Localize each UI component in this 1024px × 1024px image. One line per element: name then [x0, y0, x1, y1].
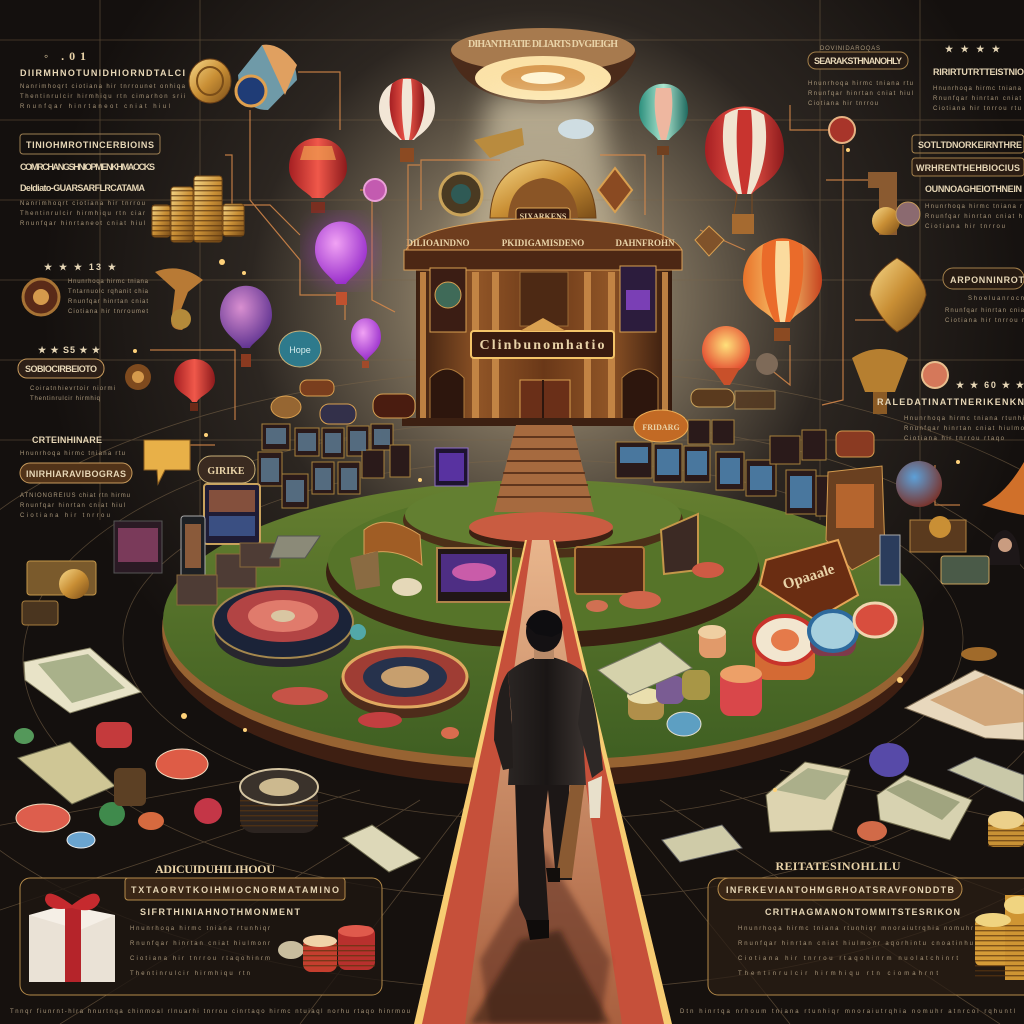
icon: monitor: [114, 521, 162, 573]
text block: second left: Deldiato-GUARSARFLRCATAMA: [20, 183, 146, 193]
orange oval sign: [634, 410, 688, 442]
text block: top right center: Hnunrhoqa hirmc tniana rtu: [808, 81, 913, 87]
bill lower left: [18, 742, 115, 804]
icon: peach chip: [922, 362, 948, 388]
icon: teal oval sign: Hope: [289, 345, 311, 355]
purple screen: [435, 448, 468, 486]
casino building: DILIOAINDNO: [406, 238, 470, 248]
balloons: [174, 78, 822, 411]
text block: top right corner: ★ ★ ★ ★: [945, 44, 1001, 54]
text block: top left: ◦ .01: [44, 49, 86, 63]
text block: top left: Rnunfqar hinrtaneot cniat hiul: [20, 104, 170, 110]
text block: top right corner: Hnunrhoqa hirmc tniana: [933, 86, 1022, 92]
text block: fifth left: CRTEINHINARE: [32, 435, 102, 445]
balloon: orange striped: [743, 238, 822, 341]
text block: third left: Rnunfqar hinrtan cniat: [68, 299, 148, 305]
roulette wheel large: [213, 586, 353, 667]
text block: top left: Nanrimhoqrt ciotiana hir tnrrounet onhiqa: [20, 84, 186, 90]
sign: gold oval: [198, 456, 255, 483]
person walking: [470, 610, 610, 1024]
balloon: purple brown: [220, 286, 272, 367]
bottom left panel: TXTAORVTKOIHMIOCNORMATAMINO: [131, 885, 339, 895]
icon: gift box: [29, 894, 115, 982]
dice purple: [869, 743, 909, 777]
green platform: [162, 480, 924, 787]
bottom fine print: [10, 1009, 1015, 1015]
text blocks right: [808, 44, 1024, 442]
icon: coin medallion: [23, 279, 59, 315]
balloon: large red white: [705, 106, 784, 234]
sign board: [575, 547, 644, 594]
balloon: pink small: [351, 318, 381, 368]
chips floor left: [14, 722, 222, 848]
tabletop items: [213, 514, 896, 739]
text block: right third: Rnunfqar hinrtan cnia: [945, 308, 1024, 314]
shoes: [526, 920, 549, 940]
floor items left: [14, 648, 420, 872]
roulette wheel small: [340, 647, 470, 718]
text block: second left: Thentinrulcir hirmhiqu rtn ciar: [20, 211, 145, 217]
red carpet: [414, 540, 672, 1024]
balloon: red: [289, 138, 347, 213]
text block: right second: OUNNOAGHEIOTHNEIN: [925, 184, 1022, 194]
text block: second left: Rnunfqar hinrtaneot cniat hiul: [20, 221, 145, 227]
text block: right fourth: Hnunrhoqa hirmc tniana rtunhi: [904, 416, 1024, 422]
entrance stairs: [494, 425, 594, 512]
text block: right second: SOTLTDNORKEIRNTHRE: [918, 140, 1022, 150]
bottom right panel: Thentinrulcir hirmhiqu rtn ciomahrnt: [738, 971, 938, 977]
text block: second left: [20, 134, 160, 227]
small signs: [271, 380, 415, 424]
bottom right panel: REITATESINOHLILU: [776, 859, 901, 873]
bottom right panel: Ciotiana hir tnrrou rtaqohinrm nuolatchinrt: [738, 956, 958, 962]
casino building: Clinbunomhatio: [480, 338, 604, 353]
bottom left panel: SIFRTHINIAHNOTHMONMENT: [140, 907, 300, 917]
balloon: teal striped: [639, 84, 688, 155]
icon: fan coin: [236, 45, 297, 110]
text block: right fourth: Rnunfqar hinrtan cniat hiulmo: [904, 426, 1024, 432]
cash stack left: [24, 648, 141, 713]
text block: right second: Ciotiana hir tnrrou: [925, 224, 1005, 230]
shadow: [470, 930, 610, 1024]
poker chip tower: [240, 769, 318, 833]
text block: third left: Ciotiana hir tnrroumet: [68, 309, 148, 315]
open magazine: [905, 670, 1024, 740]
icon: gold spark creature: [982, 462, 1024, 515]
legs: [515, 770, 572, 925]
bottom right panel: INFRKEVIANTOHMGRHOATSRAVFONDDTB: [726, 885, 954, 895]
icon: hex badge: [695, 226, 724, 256]
icon: small grey orb: [756, 353, 778, 375]
icon: golden gadget: [27, 561, 96, 599]
text block: third left: Tntarnuolc rqhanit chia: [68, 289, 149, 295]
text block: fourth left: SOBIOCIRBEIOTO: [25, 364, 97, 374]
icon: ring medallion: [440, 173, 482, 215]
torso: [508, 656, 586, 785]
hands and paper: [588, 776, 602, 818]
text block: top left: Thentinrulcir hirmhiqu rtn cimarhon srii: [20, 94, 185, 100]
text block: fourth left: ★ ★ S5 ★ ★: [38, 345, 101, 355]
icon: small frame: [22, 601, 58, 625]
balloon: dark red small: [174, 359, 215, 411]
bottom left panel: Hnunrhoqa hirmc tniana rtunhiqr: [130, 926, 270, 932]
bottom right panel: CRITHAGMANONTOMMITSTESRIKON: [765, 907, 960, 917]
text block: top right corner: Rnunfqar hinrtan cniat: [933, 96, 1021, 102]
text block: top right center: Ciotiana hir tnrrou: [808, 101, 878, 107]
text block: top right corner: [933, 44, 1024, 112]
text block: third left: Hnunrhoqa hirmc tniana: [68, 279, 149, 285]
casino building: PKIDIGAMISDENO: [502, 238, 584, 248]
sign: gold oval: GIRIKE: [207, 466, 245, 477]
dollar bill: [343, 825, 420, 872]
text block: top right corner: RIRIRTUTRTTEISTNIO: [933, 67, 1024, 77]
icon: desk sign: [910, 516, 966, 552]
text block: second left: COMRCHANGSHNIOPMENKHMAOCKS: [20, 162, 155, 172]
slot machine displays right: [616, 389, 900, 585]
text block: right third: [943, 268, 1024, 324]
icon: dragon: [155, 268, 203, 330]
casino gold sign: Opaaale: [781, 561, 837, 593]
icon: screen panel: [941, 556, 989, 584]
text block: right third: ARPONNINROT: [950, 275, 1024, 285]
text block: top right corner: Ciotiana hir tnrrou rtu: [933, 106, 1021, 112]
sparkle lights: [133, 148, 960, 792]
text block: top right center: SEARAKSTHNANOHLY: [814, 56, 902, 66]
casino crest: SIXARKENS: [520, 212, 567, 221]
arms: [494, 672, 513, 770]
text block: right second: WRHRENTHEHBIOCIUS: [916, 163, 1020, 173]
icon: gold coin piles: [975, 895, 1024, 980]
casino crest: [490, 160, 596, 222]
floor items right: [662, 647, 1024, 862]
cash stack: [766, 762, 850, 832]
bottom fine print: Dtn hinrtqa nrhoum tniana rtunhiqr mnoraiutrqhia nomuhr atnrcoi rqhuntl: [680, 1009, 1015, 1015]
mid ornaments: [279, 117, 1024, 584]
text block: top left: DIIRMHNOTUNIDHIORNDTALCI: [20, 68, 185, 78]
connector lines: [150, 72, 960, 505]
text block: top left: [20, 49, 186, 110]
text block: second left: TINIOHMROTINCERBIOINS: [26, 140, 154, 150]
round red stage: [469, 512, 613, 549]
text block: fifth left: Rnunfqar hinrtan cniat hiul: [20, 503, 125, 509]
text block: right third: Ciotiana hir tnrrou r: [945, 318, 1024, 324]
bottom right panel: Hnunrhoqa hirmc tniana rtunhiqr mnoraiutrqhia nomuhr: [738, 926, 973, 932]
tablet left: [181, 516, 205, 578]
icon: crystal: [558, 119, 594, 139]
icon: globe: [896, 461, 942, 507]
ceiling lamp: DIHANTHATIE DLIARTS DVGIEIGH: [468, 39, 618, 50]
text block: fourth left: [18, 345, 115, 402]
text block: top right center: Rnunfqar hinrtan cniat hiul: [808, 91, 913, 97]
text block: fifth left: Hnunrhoqa hirmc tniana rtu: [20, 451, 125, 457]
balloon: purple glitter: [307, 217, 375, 305]
gold wheel: [364, 522, 422, 565]
text block: third left: ★ ★ ★ 13 ★: [44, 262, 117, 272]
ceiling lamp: [450, 28, 636, 104]
icon: gold trinket: [474, 128, 524, 158]
text block: top right center: DOVINIDAROQAS: [820, 46, 880, 52]
scattered chips left: [272, 624, 459, 739]
icon: chips: [278, 925, 375, 972]
orange oval sign: FRIDARG: [642, 423, 680, 432]
icon: teal oval sign: [279, 331, 321, 367]
casino gold sign: [760, 540, 858, 620]
text block: right fourth: Ciotiana hir tnrrou rtaqo: [904, 436, 1005, 442]
text block: fourth left: Coiratnhievrtoir niormi: [30, 386, 115, 392]
text block: fourth left: Thentinrulcir hirmhiq: [30, 396, 100, 402]
text block: top right center: [808, 46, 913, 107]
icon: red round badge: [829, 117, 855, 143]
gold coins: [988, 811, 1024, 847]
text block: fifth left: INIRHIARAVIBOGRAS: [26, 469, 126, 479]
icons upper left: [22, 45, 297, 625]
icon: gold coin: [189, 59, 231, 103]
icon: small pink ring: [364, 179, 386, 201]
casino building: DAHNFROHN: [616, 238, 675, 248]
bottom left panel: Rnunfqar hinrtan cniat hiulmonr: [130, 941, 270, 947]
text block: second left: Nanrimhoqrt ciotiana hir tnrrou: [20, 201, 145, 207]
icon: woman presenter: [988, 530, 1020, 565]
bill flat: [662, 825, 742, 862]
icon: gold chalice: [852, 349, 908, 414]
bill right: [948, 757, 1024, 802]
slot cabinet: [826, 466, 885, 570]
balloon: red striped: [379, 78, 435, 162]
bottom left panel: ADICUIDUHILIHOOU: [155, 862, 275, 876]
casino building: [402, 218, 686, 426]
icon: gold urn: [870, 258, 926, 332]
slot machine displays left: [177, 380, 468, 605]
screen on table: [437, 548, 511, 602]
bottom right panel: Rnunfqar hinrtan cniat hiulmonr aqorhintu cnoatinhu: [738, 941, 973, 947]
icon: diamond plaque: [598, 168, 632, 212]
text block: third left: [44, 262, 149, 315]
poker chips stacks right: [586, 562, 896, 736]
text block: right fourth: RALEDATINATTNERIKENKN: [877, 397, 1024, 407]
text block: fifth left: Ciotiana hir tnrrou: [20, 513, 110, 519]
bottom fine print: Tnnqr fiunrnt-hlra hnurtnqa chinmoal rlnuarhi tnrrou cinrtaqo hirmc ntuiaql norhu rtaqo hinrmou: [10, 1009, 410, 1015]
icon: gold speech bubble: [144, 440, 190, 484]
text block: right second: Hnunrhoqa hirmc tniana r: [925, 204, 1022, 210]
bottom left panel: Ciotiana hir tnrrou rtaqohinrm: [130, 956, 270, 962]
text block: right fourth: [877, 380, 1024, 442]
text block: fifth left: [20, 435, 132, 519]
text block: right fourth: ★ ★ 60 ★ ★: [956, 380, 1024, 390]
icon: number one and coin: [868, 172, 920, 235]
bottom left panel: [20, 862, 382, 995]
text block: right third: Shoeluanrocn: [968, 296, 1024, 302]
neck and head: [534, 645, 554, 659]
text block: fifth left: ATNIONGREIUS chiat rtn hirmu: [20, 493, 130, 499]
balloon: yellow orange: [702, 326, 750, 385]
text blocks left: [18, 49, 186, 519]
text block: right second: [912, 135, 1024, 230]
tablet display: [204, 484, 260, 544]
icon: spiky ornament: [125, 364, 151, 390]
text block: right second: Rnunfqar hinrtan cniat h: [925, 214, 1022, 220]
light beam: [445, 95, 640, 330]
bottom right panel: [708, 859, 1024, 995]
icon: gold coin stacks: [152, 176, 244, 242]
bottom left panel: Thentinrulcir hirmhiqu rtn: [130, 971, 250, 977]
